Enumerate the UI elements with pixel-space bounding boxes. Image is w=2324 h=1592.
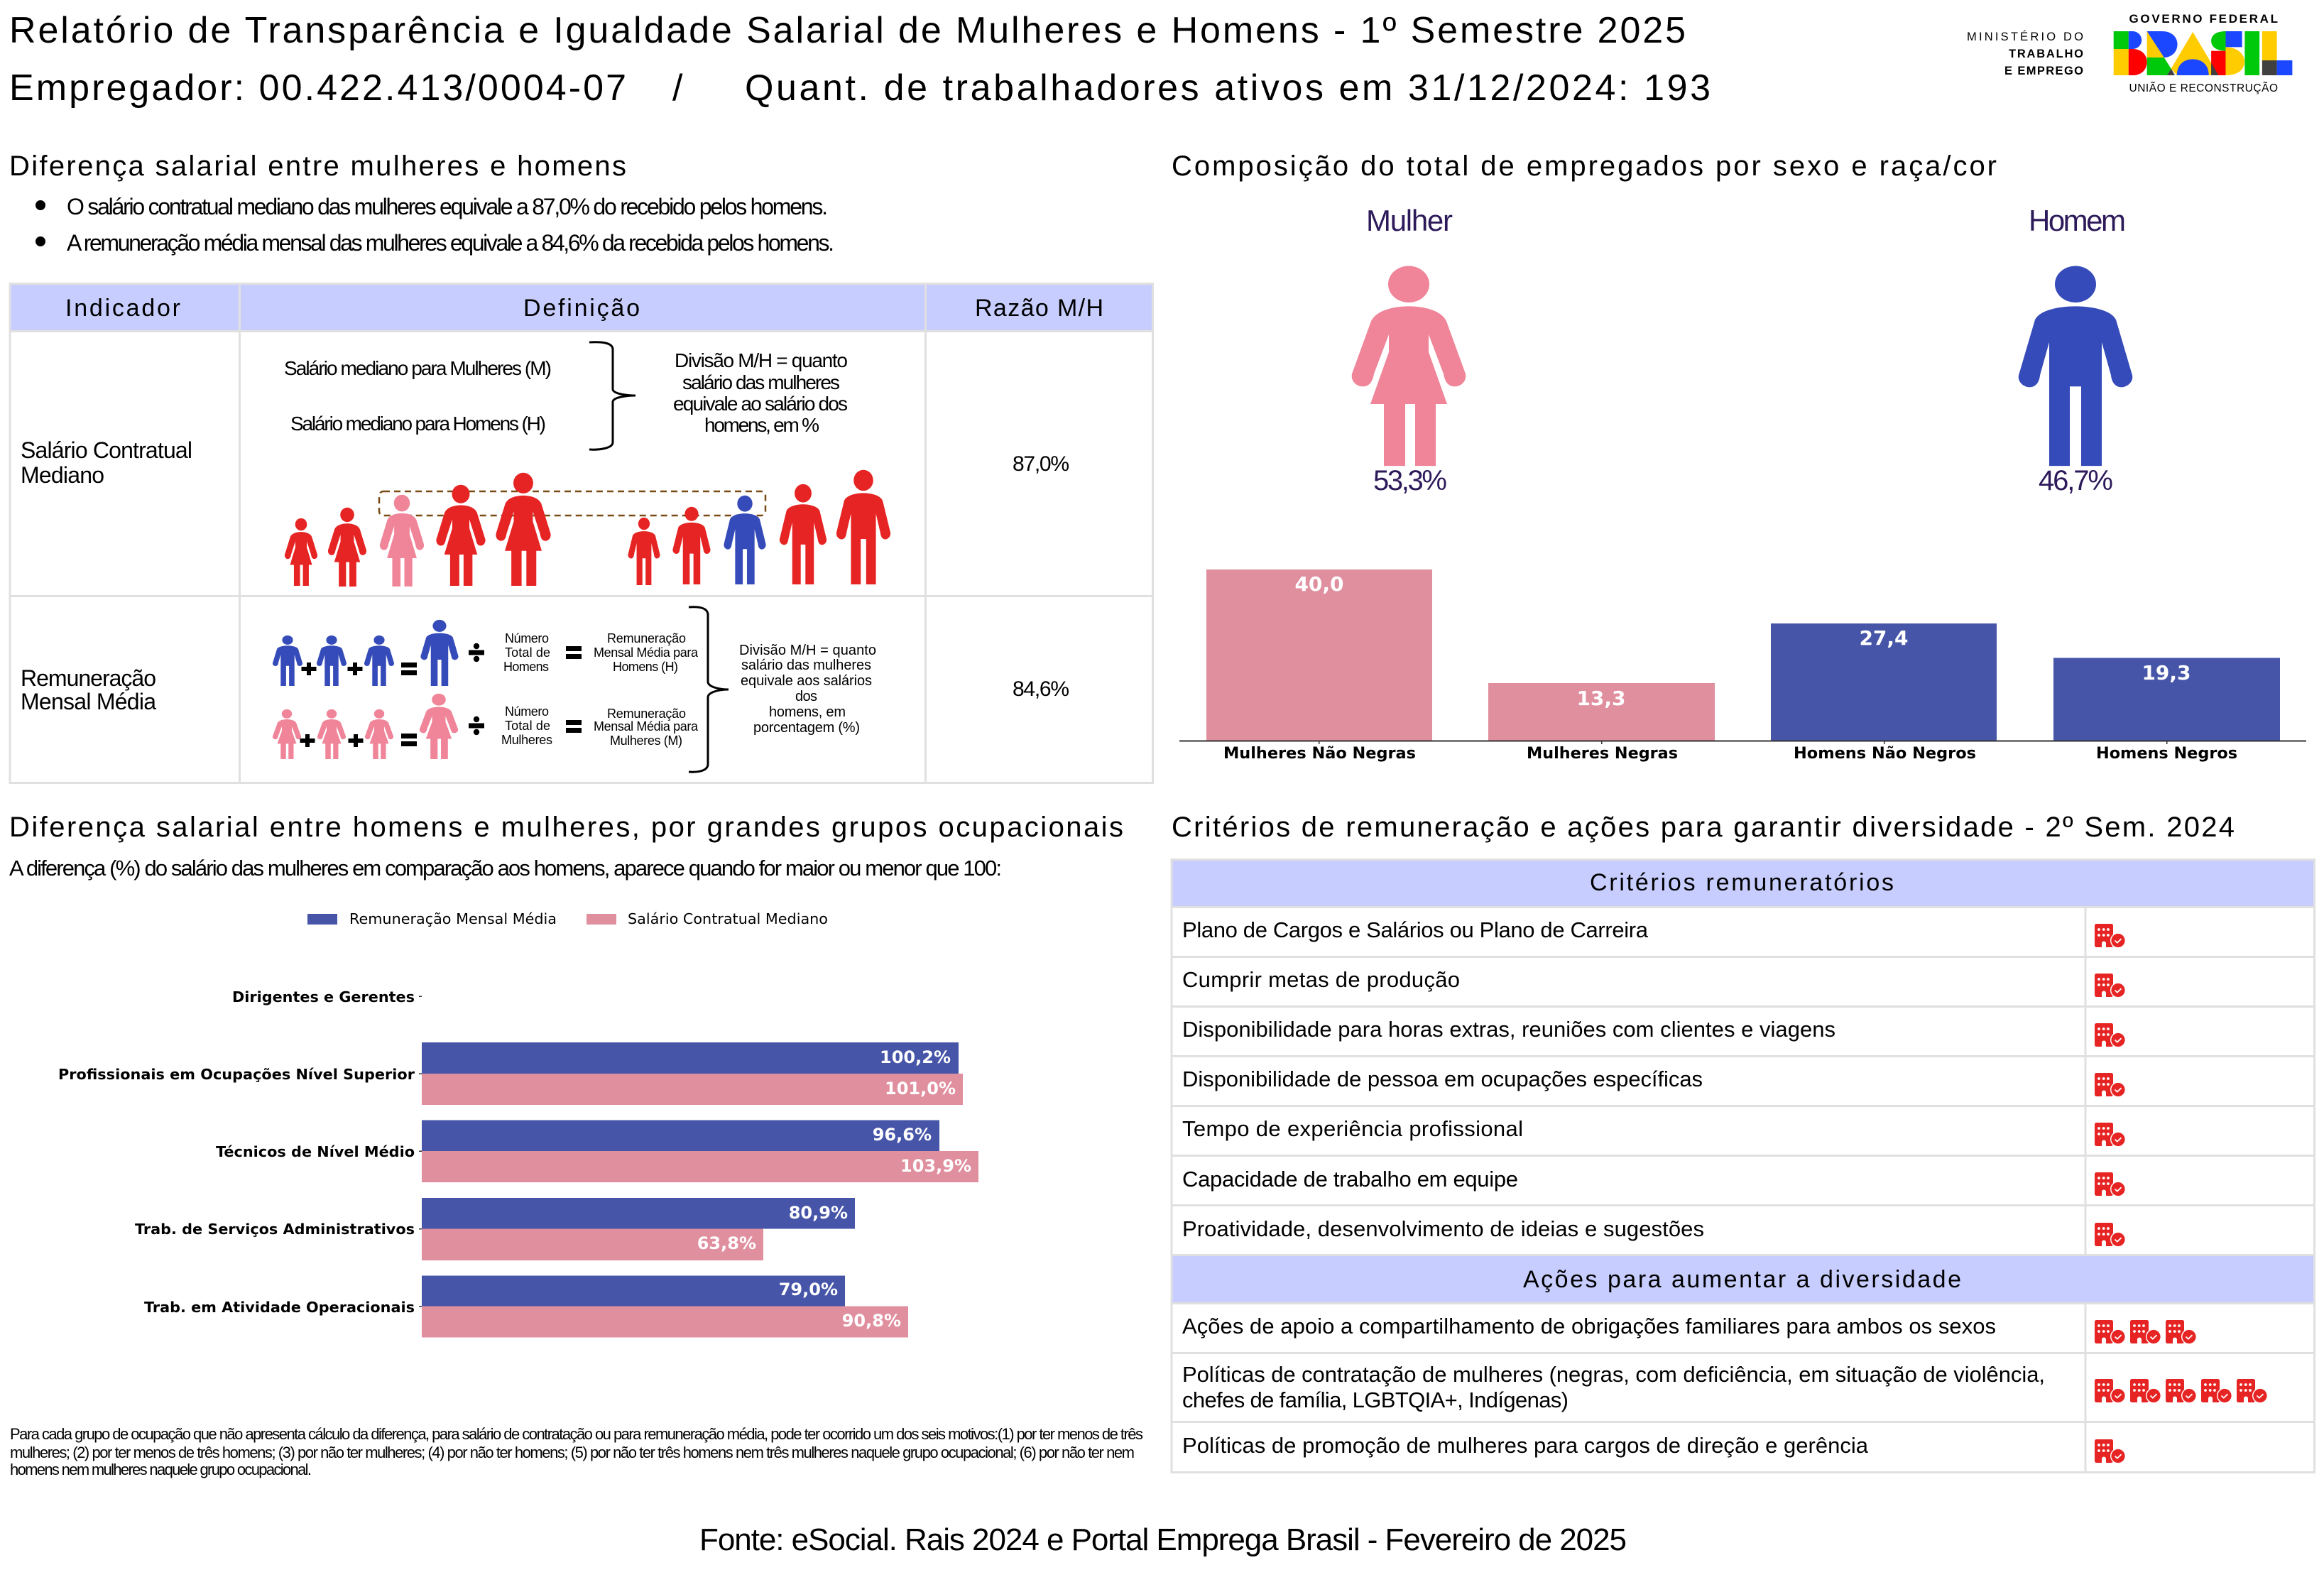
bar chart: raça/cor: Homens Não Negros [1794,745,1976,763]
logo: ministério e governo federal [1967,12,2292,94]
row: horas extras [1182,1017,2126,1048]
icon: man [2019,266,2132,466]
equation: mulheres [273,694,699,759]
bar chart: raça/cor: Mulheres Não Negras [1223,745,1416,763]
table header: Razão M/H [975,295,1103,322]
logo text: governo federal: GOVERNO FEDERAL [2129,12,2278,26]
equation: homens: Total de [505,645,550,660]
equation: homens: Número [505,631,549,645]
horizontal bar chart [58,988,978,1338]
bar chart: raça/cor: 13,3 [1576,687,1626,710]
definition explanation: Divisão M/H = quanto [739,643,876,658]
panel: grandes grupos ocupacionais [9,812,1143,1478]
bar chart: raça/cor: 19,3 [2142,661,2191,685]
bar chart: raça/cor: 27,4 [1859,626,1909,650]
table: indicadores [9,283,1154,784]
row: experiência profissional: Tempo de experiência profissional [1182,1116,1523,1141]
value: 87,0% [1013,452,1069,476]
row: trabalho em equipe [1182,1167,2126,1197]
panel: composição do total de empregados [1172,151,2306,763]
row: salário contratual mediano [21,342,1069,587]
header: ações para aumentar a diversidade: Ações para aumentar a diversidade [1523,1266,1961,1293]
equation: homens: Mensal Média para [594,645,699,660]
row: metas de produção [1182,967,2126,998]
definition explanation: homens, em % [704,414,819,436]
icon: woman [1352,266,1466,466]
logo text: ministério: TRABALHO [2009,48,2083,60]
row: políticas de contratação: Políticas de contratação de mulheres (negras, com deficiência, em situação de violência, [1182,1362,2045,1387]
bar chart: raça/cor: Mulheres Negras [1527,745,1678,763]
row: obrigações familiares [1182,1314,2197,1345]
group: serviços administrativos: 63,8% [697,1233,756,1253]
percentage: mulher: 53,3% [1373,465,1447,496]
source line: Fonte: eSocial. Rais 2024 e Portal Emprega Brasil - Fevereiro de 2025 [699,1522,1627,1557]
group: atividade operacionais: 79,0% [779,1280,838,1299]
category labels: Trab. em Atividade Operacionais [144,1299,415,1316]
definition explanation: salário das mulheres [682,371,840,393]
equation: mulheres: Mulheres (M) [610,734,682,748]
logo text: ministério: E EMPREGO [2004,65,2083,77]
category labels [58,988,422,1316]
category labels: Dirigentes e Gerentes [232,988,415,1005]
row label: Remuneração [21,665,156,691]
logo text: ministério [1967,30,2083,77]
logo text: ministério: MINISTÉRIO DO [1967,30,2083,43]
definition labels: Salário mediano para Homens (H) [290,413,546,435]
equation: mulheres: Mulheres [501,733,552,747]
group: atividade operacionais: 90,8% [842,1311,901,1331]
group: técnicos [422,1121,978,1182]
equation: mulheres: Remuneração [607,707,686,721]
header: critérios remuneratórios: Critérios remuneratórios [1590,869,1894,896]
equation: homens: Remuneração [607,631,686,645]
panel: diferença salarial entre mulheres e homens [9,151,1154,784]
footnote: Para cada grupo de ocupação que não apresenta cálculo da diferença, para salário de contratação ou para remuneração média, pode ter ocorrido um dos seis motivos:(1) por ter menos de três [10,1425,1143,1443]
definition explanation: Divisão M/H = quanto [675,349,848,371]
row: trabalho em equipe: Capacidade de trabalho em equipe [1182,1167,1518,1192]
label: homem: Homem [2029,204,2126,237]
equation: homens [273,620,699,686]
footnote [10,1425,1143,1478]
row label [21,437,192,488]
table header: Definição [523,295,640,322]
icons: mulheres por salário [285,473,551,587]
category labels: Profissionais em Ocupações Nível Superior [58,1066,415,1083]
row: políticas de promoção: Políticas de promoção de mulheres para cargos de direção e gerência [1182,1433,1869,1458]
row: proatividade [1182,1216,2126,1247]
panel: critérios de remuneração e ações [1170,812,2315,1473]
legend [307,910,828,927]
title: Relatório de Transparência e Igualdade Salarial de Mulheres e Homens - 1º Semestre 2025 [9,10,1686,51]
row label: Mediano [21,462,104,488]
group: profissionais nível superior [422,1042,963,1105]
row: obrigações familiares: Ações de apoio a compartilhamento de obrigações familiares para ambos os sexos [1182,1314,1996,1339]
bullet list [36,194,834,256]
row: políticas de contratação [1182,1362,2268,1412]
heading: Critérios de remuneração e ações para garantir diversidade - 2º Sem. 2024 [1172,812,2235,843]
heading: Composição do total de empregados por sexo e raça/cor [1172,151,1997,182]
group: atividade operacionais [422,1275,908,1338]
brace [689,607,729,772]
legend: Remuneração Mensal Média [349,910,557,927]
footnote: homens nem mulheres naquele grupo ocupacional. [10,1461,312,1478]
equation: mulheres: Total de [505,719,550,733]
row: ocupações específicas: Disponibilidade de pessoa em ocupações específicas [1182,1067,1703,1091]
definition explanation: salário das mulheres [741,658,871,673]
bullet list: A remuneração média mensal das mulheres equivale a 84,6% da recebida pelos homens. [67,230,834,256]
equation: mulheres: Mensal Média para [594,719,699,734]
row: proatividade: Proatividade, desenvolvimento de ideias e sugestões [1182,1216,1704,1241]
label: mulher: Mulher [1366,204,1453,237]
row: remuneração mensal média [21,607,1069,772]
definition explanation [673,349,848,436]
row label: Mensal Média [21,689,156,714]
logo: Brasil colored shapes [2114,31,2292,75]
row: políticas de contratação: chefes de família, LGBTQIA+, Indígenas) [1182,1387,1569,1412]
group: serviços administrativos: 80,9% [789,1203,848,1223]
brace [589,342,635,449]
definition labels: Salário mediano para Mulheres (M) [284,357,552,379]
category labels: Técnicos de Nível Médio [216,1143,415,1160]
group: serviços administrativos [422,1198,855,1260]
title: / [672,67,683,109]
row: plano de cargos: Plano de Cargos e Salários ou Plano de Carreira [1182,917,1649,942]
definition explanation: porcentagem (%) [753,720,860,736]
footnote: mulheres; (2) por ter menos de três homens; (3) por não ter mulheres; (4) por não ter homens; (5) por não ter três homens nem três mulheres naquele grupo ocupacional; (6) por não ter nem [10,1444,1135,1461]
row: plano de cargos [1182,917,2126,949]
table header: Indicador [65,295,180,322]
definition explanation: equivale ao salário dos [673,393,848,415]
equation: homens: Homens [503,660,549,674]
row label [21,665,156,714]
legend: Salário Contratual Mediano [628,910,828,927]
row: metas de produção: Cumprir metas de produção [1182,967,1460,992]
table header [65,295,1103,322]
category labels: Trab. de Serviços Administrativos [135,1221,415,1238]
logo text: união e reconstrução: UNIÃO E RECONSTRUÇÃO [2129,82,2278,94]
bar chart: raça/cor [1179,569,2306,763]
heading: Diferença salarial entre homens e mulheres, por grandes grupos ocupacionais [9,812,1123,843]
bar chart: raça/cor: 40,0 [1294,572,1344,596]
title [9,10,1711,109]
group: profissionais nível superior: 100,2% [880,1047,951,1067]
icons: homens por salário [628,470,890,585]
definition labels [284,357,552,435]
group: profissionais nível superior: 101,0% [885,1079,956,1098]
definition explanation: dos [795,689,817,704]
bar chart: raça/cor: Homens Negros [2096,745,2237,763]
bullet list: O salário contratual mediano das mulheres equivale a 87,0% do recebido pelos homens. [67,194,828,219]
table: critérios e ações [1170,858,2315,1473]
group: técnicos: 103,9% [900,1156,971,1176]
definition explanation [739,643,876,736]
title: Quant. de trabalhadores ativos em 31/12/2024: 193 [745,67,1711,109]
subtitle: A diferença (%) do salário das mulheres em comparação aos homens, aparece quando for maior ou menor que 100: [9,856,1002,880]
title: Empregador: 00.422.413/0004-07 [9,67,626,109]
definition explanation: homens, em [769,704,846,720]
value: 84,6% [1013,677,1069,701]
definition explanation: equivale aos salários [741,673,872,689]
heading: Diferença salarial entre mulheres e homens [9,151,626,182]
group: técnicos: 96,6% [873,1125,932,1145]
row: ocupações específicas [1182,1067,2126,1098]
row label: Salário Contratual [21,437,192,463]
equation: mulheres: Número [505,704,549,719]
equation: homens: Homens (H) [613,660,678,674]
row: políticas de promoção [1182,1433,2126,1464]
percentage: homem: 46,7% [2039,465,2113,496]
dashed median highlight [379,491,765,516]
row: horas extras: Disponibilidade para horas extras, reuniões com clientes e viagens [1182,1017,1835,1042]
row: experiência profissional [1182,1116,2126,1147]
